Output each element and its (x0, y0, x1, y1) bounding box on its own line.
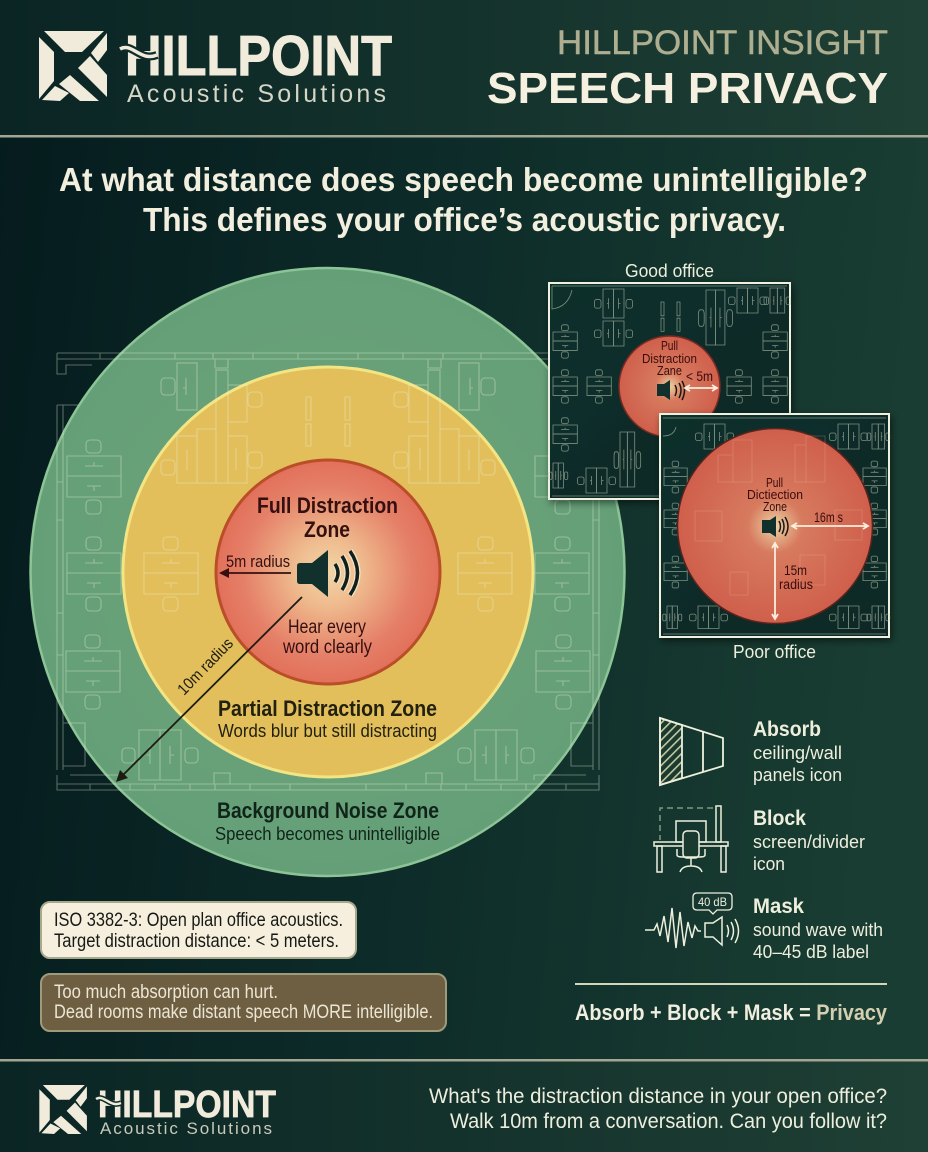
call to action (429, 1085, 887, 1133)
panel: absorb (660, 718, 842, 785)
icon: speaker (297, 550, 358, 597)
text: hear every word clearly: Hear every (288, 617, 366, 638)
zone label: Zone (763, 499, 787, 514)
zone: partial distraction (123, 367, 533, 777)
headline question: At what distance does speech become unintelligible? (59, 161, 868, 198)
wordmark: HILLPOINT (125, 24, 392, 88)
arrow: 5m radius (219, 552, 291, 578)
callout: 40 dB: 40 dB (698, 895, 727, 909)
text: block (753, 807, 865, 874)
label: background noise zone: Background Noise Zone (217, 798, 439, 823)
arrow: less than 5m: < 5m (686, 369, 713, 384)
text: block: Block (753, 807, 806, 830)
label: partial distraction zone: Partial Distraction Zone (218, 696, 437, 721)
arrow: 15m radius: radius (779, 577, 813, 592)
call to action: Walk 10m from a conversation. Can you follow it? (450, 1110, 887, 1133)
call to action: What's the distraction distance in your open office? (429, 1085, 887, 1108)
zone label: Dictiection (747, 487, 803, 502)
text: block: screen/divider (753, 831, 865, 852)
zone label (642, 338, 697, 378)
text: absorb (753, 718, 842, 785)
text: absorb: panels icon (753, 764, 842, 785)
text: mask (753, 895, 883, 962)
icon: speaker (657, 380, 684, 400)
zone: full distraction, good office (619, 336, 720, 437)
tagline: Acoustic Solutions (100, 1119, 272, 1138)
icon: footer logo mark (39, 1085, 87, 1134)
icon: desk with divider (654, 806, 728, 872)
label: partial distraction zone (218, 696, 437, 741)
floor plan overlay (57, 353, 599, 790)
logo: Hillpoint footer (39, 1084, 276, 1138)
distraction zone diagram (30, 268, 624, 876)
callout: absorption warning: Dead rooms make distant speech MORE intelligible. (54, 1002, 433, 1023)
zone: background noise (30, 268, 624, 876)
text: absorb: Absorb (753, 718, 821, 741)
faint plan inside zone (695, 436, 862, 595)
heading: full distraction zone: Full Distraction (257, 493, 398, 518)
icon: sound wave with speaker (645, 908, 738, 948)
arrow: 5m radius: 5m radius (226, 552, 290, 571)
zone label: Pull (766, 475, 783, 490)
inset floor plan (549, 286, 791, 496)
icon: logo wave (120, 47, 157, 57)
arrow: 10m radius (116, 597, 302, 782)
title: SPEECH PRIVACY (487, 64, 888, 113)
label: background noise zone: Speech becomes unintelligible (215, 823, 440, 844)
tagline: Acoustic Solutions (127, 80, 386, 108)
arrow: less than 5m (685, 369, 717, 391)
text: mask: Mask (753, 895, 804, 918)
arrow: 16m (792, 510, 868, 529)
arrow: 15m radius: 15m (784, 563, 807, 578)
text: mask: sound wave with (753, 919, 883, 940)
heading: full distraction zone (257, 493, 398, 542)
icon: absorb panels (660, 718, 723, 785)
inset frame (660, 414, 889, 637)
callout: ISO standard (41, 902, 356, 958)
zone: full distraction, poor office (678, 428, 872, 624)
formula: Absorb + Block + Mask = Privacy (575, 1000, 888, 1025)
zone label: Zane (657, 363, 682, 378)
text: hear every word clearly (282, 617, 372, 658)
callout: ISO standard: ISO 3382-3: Open plan office acoustics. (54, 910, 343, 931)
panel: mask (645, 893, 883, 962)
inset frame (549, 283, 790, 499)
label: partial distraction zone: Words blur but still distracting (218, 720, 437, 741)
header band (0, 0, 928, 138)
icon: Hillpoint logo mark (39, 31, 107, 101)
panel: block (654, 806, 865, 874)
label: poor office: Poor office (733, 642, 816, 662)
text: mask: 40–45 dB label (753, 941, 869, 962)
callout: absorption warning (41, 974, 446, 1031)
icon: logo wave (96, 1098, 121, 1104)
icon: speaker (762, 516, 788, 537)
zone label: Distraction (642, 351, 697, 366)
text: block: icon (753, 853, 785, 874)
zone: full distraction (216, 460, 440, 684)
label: background noise zone (215, 798, 440, 844)
header title (487, 24, 888, 113)
callout: ISO standard: Target distraction distance: < 5 meters. (54, 931, 339, 952)
heading: full distraction zone: Zone (304, 517, 350, 542)
text: absorb: ceiling/wall (753, 742, 842, 763)
zone label: Pull (661, 338, 678, 353)
logo: Hillpoint header (39, 24, 392, 108)
zone label (747, 475, 803, 514)
footer band (0, 1059, 928, 1152)
eyebrow: HILLPOINT INSIGHT (557, 24, 888, 62)
panel: good office (549, 261, 791, 499)
headline question: This defines your office’s acoustic privacy. (143, 201, 786, 238)
arrow: 16m: 16m s (814, 510, 843, 525)
inset floor plan (663, 418, 890, 634)
arrow: 15m radius (772, 543, 813, 619)
text: hear every word clearly: word clearly (282, 637, 372, 658)
panel: poor office (660, 414, 890, 662)
callout: absorption warning: Too much absorption can hurt. (54, 982, 278, 1003)
callout: 40 dB (693, 893, 732, 914)
wordmark: HILLPOINT (98, 1084, 276, 1126)
label: good office: Good office (625, 261, 714, 281)
headline question (59, 161, 868, 238)
arrow: 10m radius: 10m radius (175, 635, 237, 699)
